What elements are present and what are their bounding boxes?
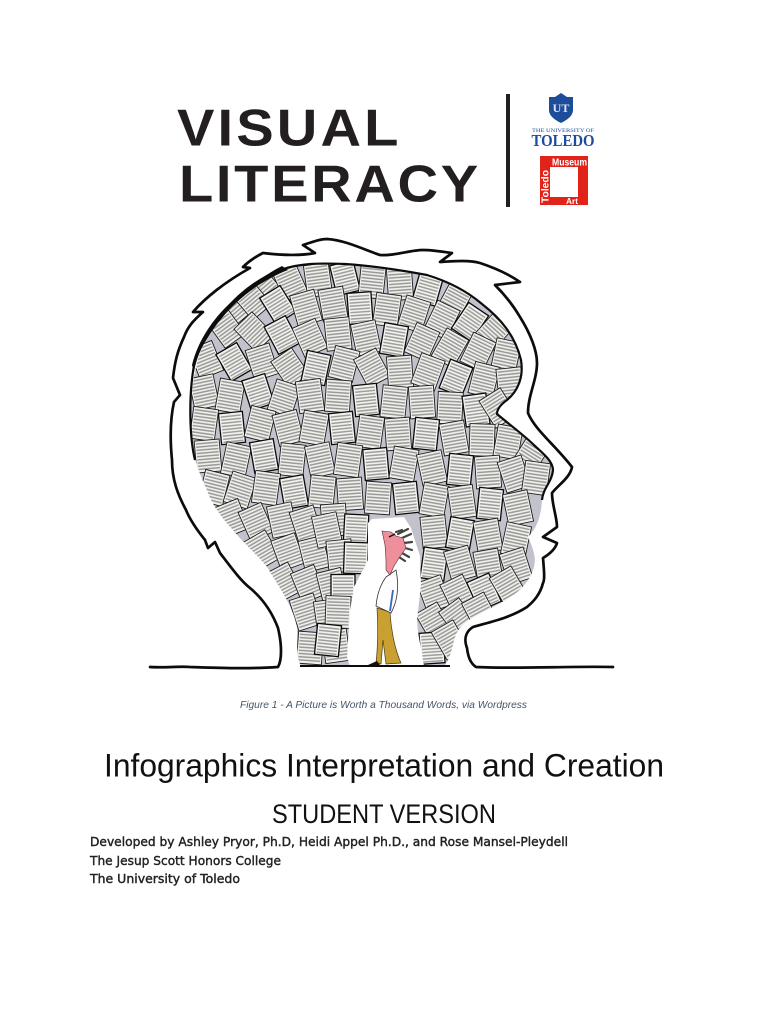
logo divider (506, 94, 510, 207)
logo: Toledo Museum of Art: Museum (552, 158, 587, 168)
credits: The Jesup Scott Honors College (89, 854, 281, 868)
head shadow stroke upper left (192, 266, 288, 372)
logo: Visual Literacy wordmark (177, 99, 478, 213)
man trousers (376, 608, 401, 664)
logo: University of Toledo: UT (553, 101, 569, 115)
credits (89, 835, 568, 886)
figure caption: Figure 1 - A Picture is Worth a Thousand Words, via Wordpress (240, 700, 527, 711)
papers: middle (192, 373, 218, 408)
papers: lower right (420, 515, 448, 549)
head paper fill (180, 255, 560, 670)
papers: top arcs (257, 277, 278, 294)
ground line (300, 665, 450, 667)
logo: University of Toledo (532, 93, 594, 150)
subtitle: STUDENT VERSION (272, 799, 496, 829)
man face (382, 531, 406, 575)
head outer outline (150, 239, 613, 668)
figure: man looking up (368, 529, 412, 665)
logo: Visual Literacy wordmark: LITERACY (179, 155, 478, 213)
head inner outline (190, 264, 553, 500)
man shoes (368, 661, 380, 665)
logo: University of Toledo: TOLEDO (532, 131, 594, 150)
illustration: head filled with papers (150, 239, 613, 670)
main title: Infographics Interpretation and Creation (104, 748, 664, 784)
logo: University of Toledo: THE UNIVERSITY OF (532, 128, 594, 134)
logo: Toledo Museum of Art: Toledo (540, 170, 552, 203)
logo: Toledo Museum of Art: of (578, 190, 585, 197)
man hair (396, 529, 412, 561)
logo: Visual Literacy wordmark: VISUAL (177, 99, 398, 157)
logo: Toledo Museum of Art (540, 156, 588, 206)
credits: Developed by Ashley Pryor, Ph.D, Heidi Appel Ph.D., and Rose Mansel-Pleydell (90, 835, 568, 849)
credits: The University of Toledo (89, 872, 240, 886)
logo: Toledo Museum of Art: Art (566, 197, 578, 206)
man shirt (376, 570, 398, 613)
papers: lower left (215, 498, 246, 534)
